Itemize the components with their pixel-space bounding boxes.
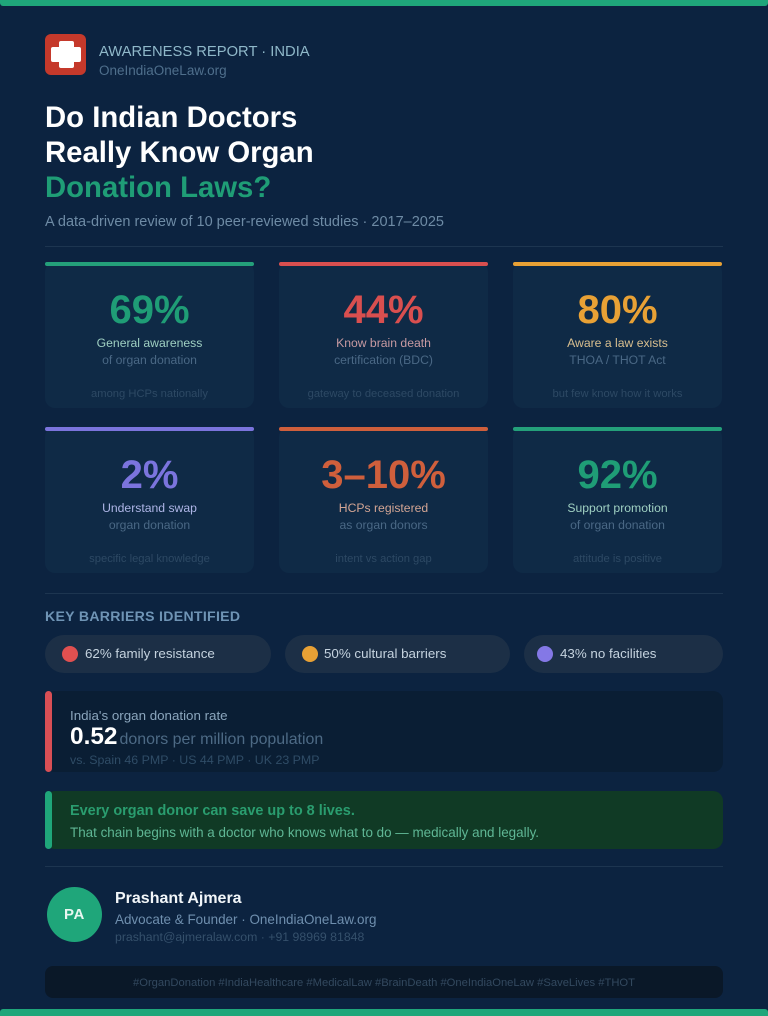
stat card: law exists: but few know how it works (553, 388, 682, 400)
stat card: support promotion: attitude is positive (573, 552, 662, 564)
stat card: brain death: Know brain death (336, 336, 431, 350)
stat card: support promotion: Support promotion (567, 501, 668, 515)
header (45, 34, 310, 78)
rate value: 0.52donors per million population (70, 723, 323, 750)
stat card: brain death: 44% (343, 288, 424, 332)
author block (47, 887, 376, 944)
avatar: PA (64, 906, 85, 923)
barriers heading: KEY BARRIERS IDENTIFIED (45, 608, 240, 624)
top accent bar (0, 0, 768, 6)
barrier pill: facilities: 43% no facilities (560, 646, 656, 661)
subtitle: A data-driven review of 10 peer-reviewed studies · 2017–2025 (45, 214, 444, 230)
barrier pill: cultural: 50% cultural barriers (324, 646, 446, 661)
stat card: brain death: certification (BDC) (334, 353, 433, 367)
barrier pill: facilities (524, 635, 723, 673)
stat card: registered donors (279, 427, 488, 573)
stat card: brain death: gateway to deceased donation (308, 388, 459, 400)
callout headline: Every organ donor can save up to 8 lives. (70, 803, 355, 819)
stat card: general awareness: among HCPs nationally (91, 388, 208, 400)
website: OneIndiaOneLaw.org (99, 63, 227, 78)
title: Really Know Organ (45, 136, 314, 169)
stat card: registered donors: HCPs registered (339, 501, 428, 515)
callout accent (45, 791, 52, 849)
icon: medical cross (45, 34, 86, 75)
title: Donation Laws? (45, 171, 271, 204)
barrier pill: family (45, 635, 271, 673)
stat card: support promotion: of organ donation (570, 518, 665, 532)
comparison: vs. Spain 46 PMP · US 44 PMP · UK 23 PMP (70, 753, 320, 767)
bottom accent bar (0, 1009, 768, 1016)
stat card: support promotion (513, 427, 722, 573)
hashtags (45, 966, 723, 998)
stat card: swap donation: specific legal knowledge (89, 552, 210, 564)
stat card: swap donation: 2% (121, 453, 178, 497)
stat card: general awareness: of organ donation (102, 353, 197, 367)
stat card: general awareness: General awareness (97, 336, 202, 350)
stat card: registered donors: as organ donors (339, 518, 428, 532)
stat card: swap donation: Understand swap (102, 501, 197, 515)
stat card: brain death (279, 262, 488, 408)
rate label: India's organ donation rate (70, 708, 228, 723)
stat card: general awareness (45, 262, 254, 408)
author contact: prashant@ajmeralaw.com · +91 98969 81848 (115, 930, 364, 944)
avatar (47, 887, 102, 942)
barrier pill: family: 62% family resistance (85, 646, 215, 661)
barrier pill: cultural (285, 635, 510, 673)
callout text: That chain begins with a doctor who knows what to do — medically and legally. (70, 825, 539, 840)
stat card: law exists (513, 262, 722, 408)
stat card: support promotion: 92% (577, 453, 658, 497)
stat card: law exists: THOA / THOT Act (569, 353, 666, 367)
stat card: swap donation: organ donation (109, 518, 190, 532)
callout accent (45, 691, 52, 772)
stat card: law exists: Aware a law exists (567, 336, 668, 350)
title: Do Indian Doctors (45, 101, 297, 134)
stat card: general awareness: 69% (109, 288, 190, 332)
title (45, 101, 314, 204)
report label: AWARENESS REPORT · INDIA (99, 44, 310, 60)
hashtags: #OrganDonation #IndiaHealthcare #MedicalLaw #BrainDeath #OneIndiaOneLaw #SaveLives #THOT (133, 977, 635, 989)
stat card: swap donation (45, 427, 254, 573)
stat card: registered donors: 3–10% (321, 453, 446, 497)
callout: save lives (45, 791, 723, 849)
stat card: registered donors: intent vs action gap (335, 552, 432, 564)
author role: Advocate & Founder · OneIndiaOneLaw.org (115, 912, 376, 927)
callout: donation rate (45, 691, 723, 772)
stat card: law exists: 80% (577, 288, 658, 332)
author name: Prashant Ajmera (115, 890, 242, 907)
